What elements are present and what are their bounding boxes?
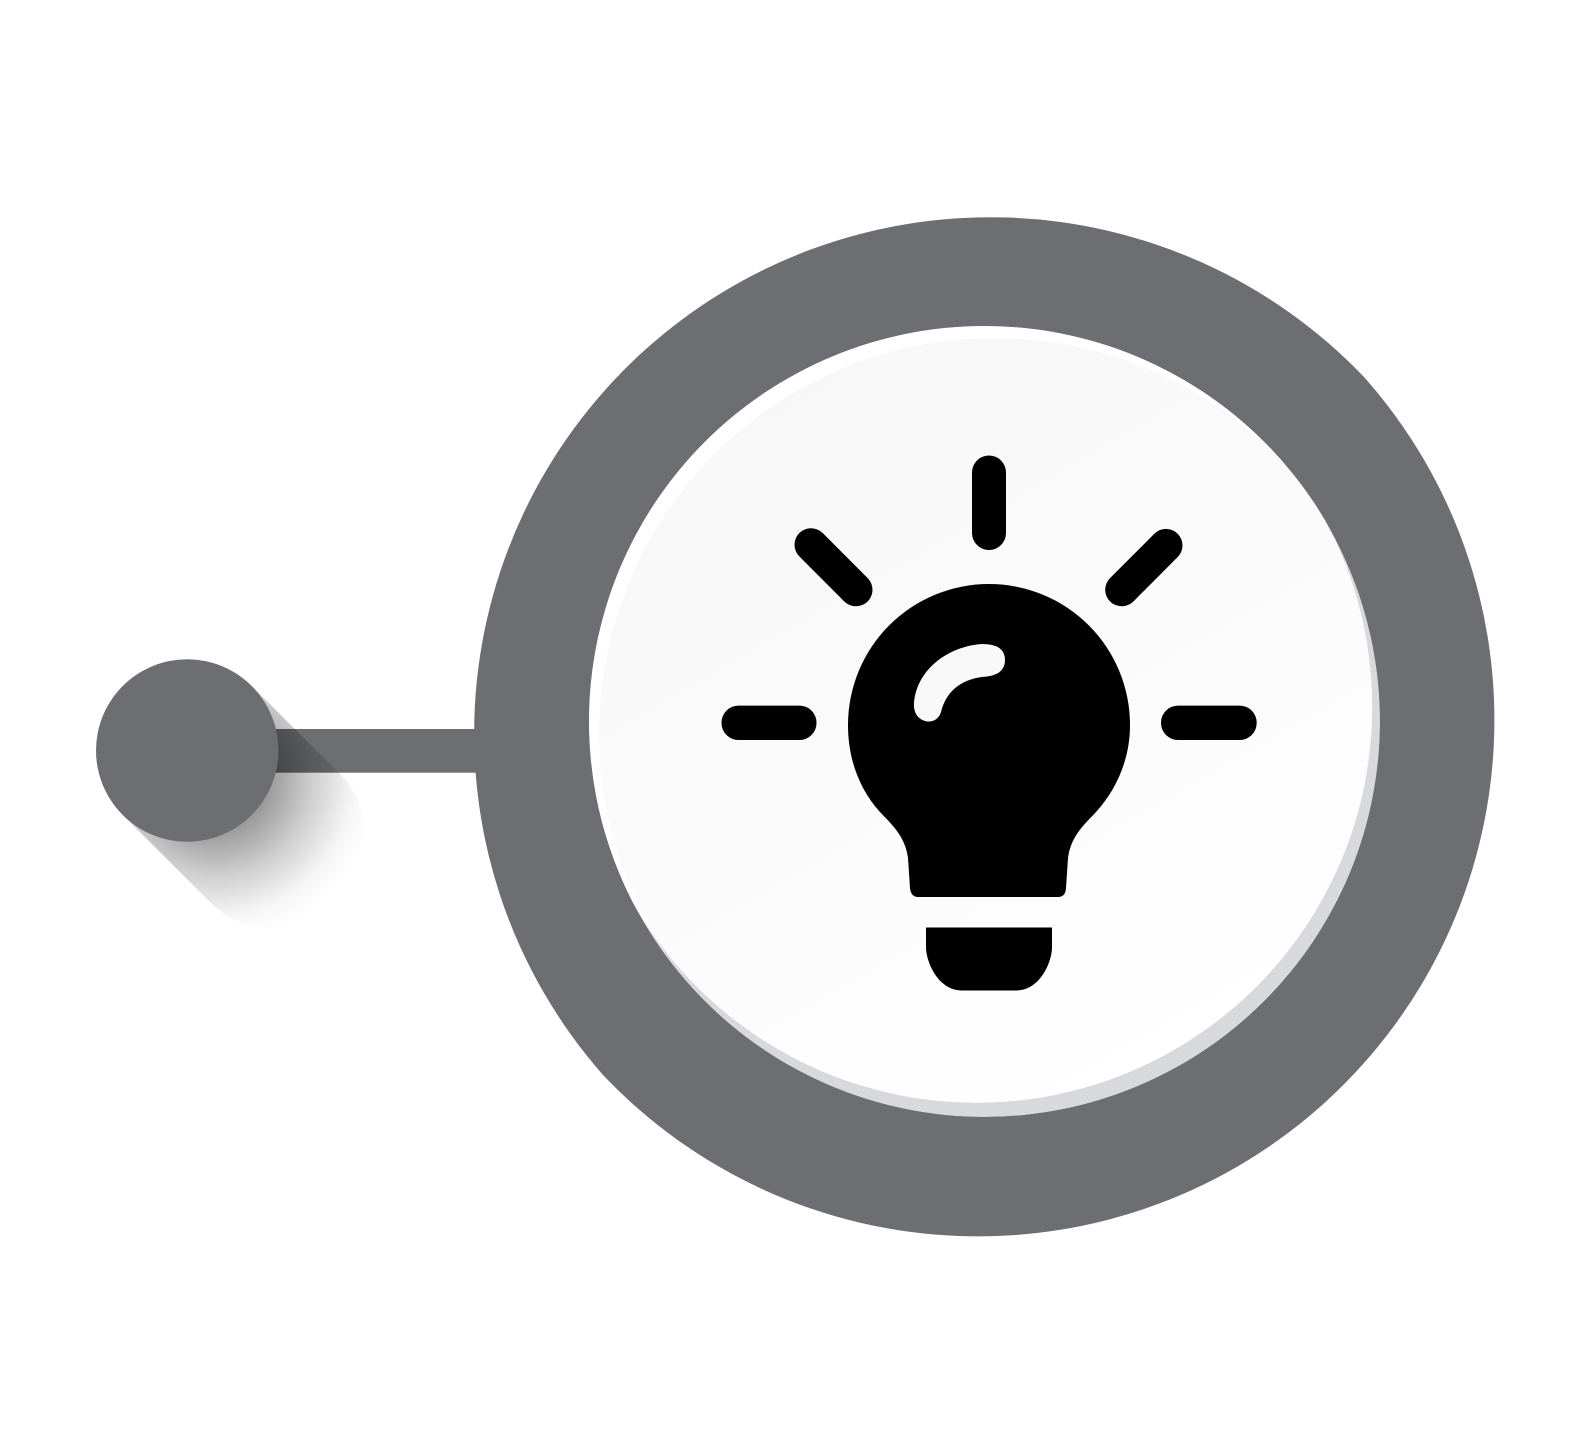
long shadow of node [123, 686, 366, 929]
icon: bulb base [926, 928, 1052, 990]
disc bevel: grey lower crescent [589, 326, 1380, 1117]
outer ring [474, 217, 1494, 1236]
disc face [708, 473, 1372, 1103]
connector bar [260, 729, 485, 773]
connector node circle [96, 659, 278, 842]
icon: bulb highlight [914, 644, 1005, 722]
icon: bulb rays [722, 456, 1257, 740]
infographic: lightbulb badge with connector [96, 217, 1494, 1236]
icon: light bulb [722, 456, 1257, 990]
icon: bulb glass [848, 584, 1130, 897]
disc bevel: white upper crescent [581, 312, 1372, 1103]
inner disc [581, 312, 1390, 1129]
